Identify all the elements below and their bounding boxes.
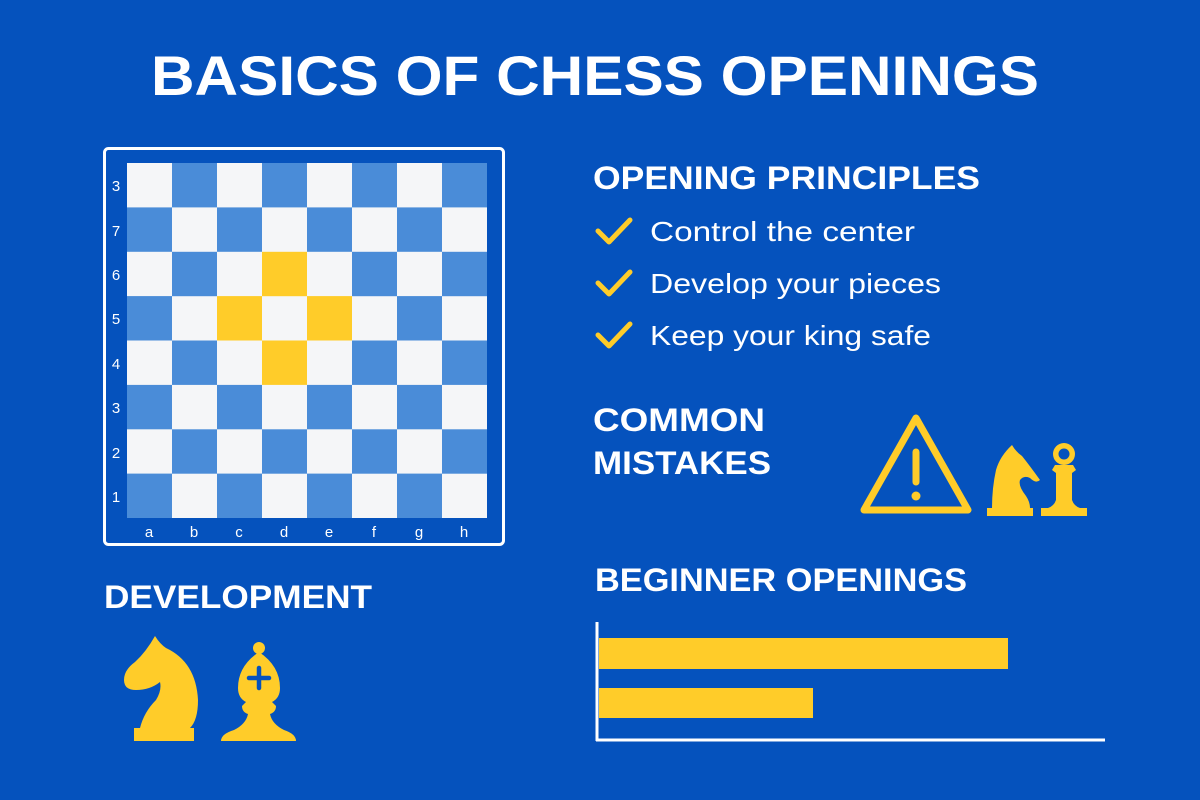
icon: development bishop [221, 642, 296, 741]
rank labels: 1 [112, 489, 120, 506]
file labels: c [235, 524, 243, 541]
rank labels: 3 [112, 400, 120, 417]
heading: development: DEVELOPMENT [104, 579, 372, 615]
item: develop your pieces: Develop your pieces [650, 268, 941, 299]
bar 1 [599, 638, 1008, 669]
icon: knight [987, 445, 1040, 516]
bar 2 [599, 688, 813, 718]
title: BASICS OF CHESS OPENINGS [151, 44, 1039, 107]
principles list [598, 216, 941, 351]
heading: common mistakes: COMMON [593, 402, 765, 438]
file labels: e [325, 524, 333, 541]
heading: beginner openings: BEGINNER OPENINGS [595, 562, 967, 598]
file labels: g [415, 524, 423, 541]
file labels: h [460, 524, 468, 541]
icon: warning triangle [864, 418, 968, 510]
rank labels: 7 [112, 223, 120, 240]
icon: development knight [124, 636, 198, 741]
chess board [104, 148, 504, 544]
heading: common mistakes: MISTAKES [593, 445, 771, 481]
rank labels: 4 [112, 356, 120, 373]
rank labels [112, 178, 120, 506]
rank labels: 6 [112, 267, 120, 284]
file labels: f [372, 524, 377, 541]
icon: pawn [1041, 443, 1087, 516]
rank labels: 5 [112, 311, 120, 328]
squares [127, 163, 487, 518]
bar chart [596, 622, 1105, 741]
rank labels: 2 [112, 445, 120, 462]
file labels [145, 524, 468, 541]
item: keep your king safe: Keep your king safe [650, 320, 931, 351]
heading: opening principles: OPENING PRINCIPLES [593, 160, 980, 196]
rank labels: 3 [112, 178, 120, 195]
file labels: d [280, 524, 288, 541]
file labels: a [145, 524, 154, 541]
item: control the center: Control the center [650, 216, 915, 247]
file labels: b [190, 524, 198, 541]
